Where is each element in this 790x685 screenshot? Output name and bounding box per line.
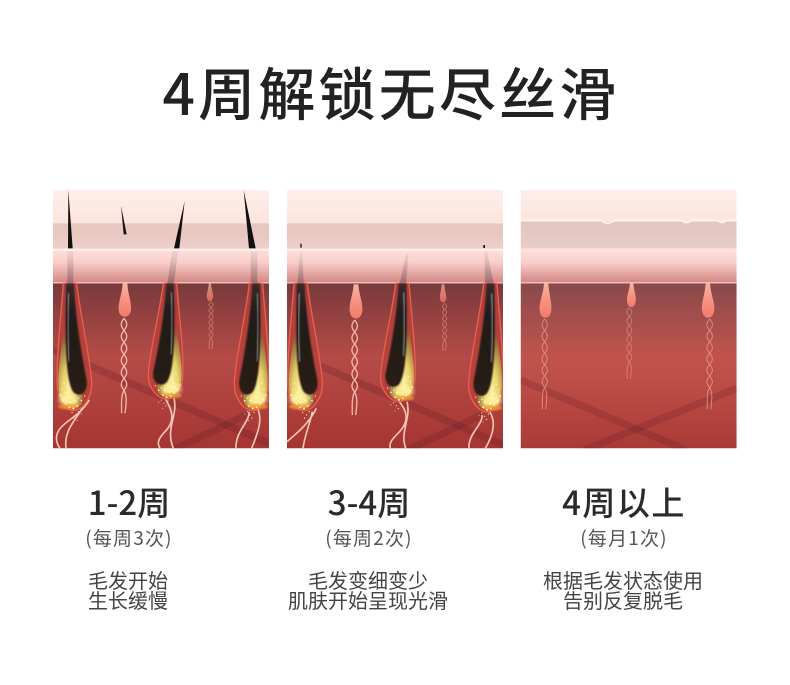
heading: stage 2: 3-4周 [328, 477, 410, 525]
skin surface [521, 190, 737, 222]
description: stage 1: 毛发开始 [88, 565, 168, 594]
heading: stage 3: 4周以上 [562, 477, 686, 525]
large follicle 2 [148, 283, 183, 409]
small follicle with twisted root [119, 283, 131, 413]
title: 4周解锁无尽丝滑 [162, 50, 620, 132]
illustration panels [53, 190, 737, 448]
faint small follicle [440, 284, 447, 351]
shrunken follicle 1 [540, 283, 551, 409]
large follicle 2 [381, 283, 415, 412]
large follicle 1 [57, 283, 92, 421]
dermis band [521, 248, 737, 282]
shrunken follicle 2 [627, 283, 636, 379]
follicle roots [287, 400, 493, 448]
description: stage 1 [88, 565, 168, 614]
short hair tips [300, 244, 485, 248]
description: stage 2: 肌肤开始呈现光滑 [288, 585, 448, 614]
follicle roots [56, 398, 260, 448]
hair shafts inside dermis [298, 251, 494, 283]
panel: 4+ weeks skin cross-section [521, 190, 737, 450]
large follicle 1 [288, 283, 322, 421]
description: stage 2 [288, 565, 448, 614]
large follicle 3 [469, 283, 503, 423]
skin layers [287, 190, 503, 448]
frequency: stage 2: (每周2次) [325, 524, 413, 551]
description: stage 3 [543, 565, 703, 614]
lower tissue [521, 283, 737, 448]
small follicle with twisted root [350, 284, 362, 415]
panel: 1-2 weeks skin cross-section [53, 190, 269, 450]
skin surface line with pores [521, 220, 737, 223]
skin layers [53, 190, 269, 448]
frequency: stage 3: (每月1次) [580, 524, 668, 551]
hair shafts inside dermis [67, 251, 257, 283]
dark vessel bands [53, 350, 269, 450]
shrunken follicle 3 [702, 283, 714, 409]
epidermis band [521, 222, 737, 249]
dark vessel bands [521, 380, 737, 450]
description: stage 1: 生长缓慢 [88, 585, 168, 614]
heading: stage 1: 1-2周 [88, 477, 170, 525]
description: stage 3: 根据毛发状态使用 [543, 565, 703, 594]
panel: 3-4 weeks skin cross-section [287, 190, 503, 450]
hair shafts above skin [68, 190, 256, 248]
frequency: stage 1: (每周3次) [85, 524, 173, 551]
dark vessel bands [318, 365, 503, 450]
large follicle 3 [234, 283, 269, 421]
description: stage 3: 告别反复脱毛 [563, 585, 683, 614]
description: stage 2: 毛发变细变少 [308, 565, 428, 594]
faint small follicle [207, 283, 213, 349]
